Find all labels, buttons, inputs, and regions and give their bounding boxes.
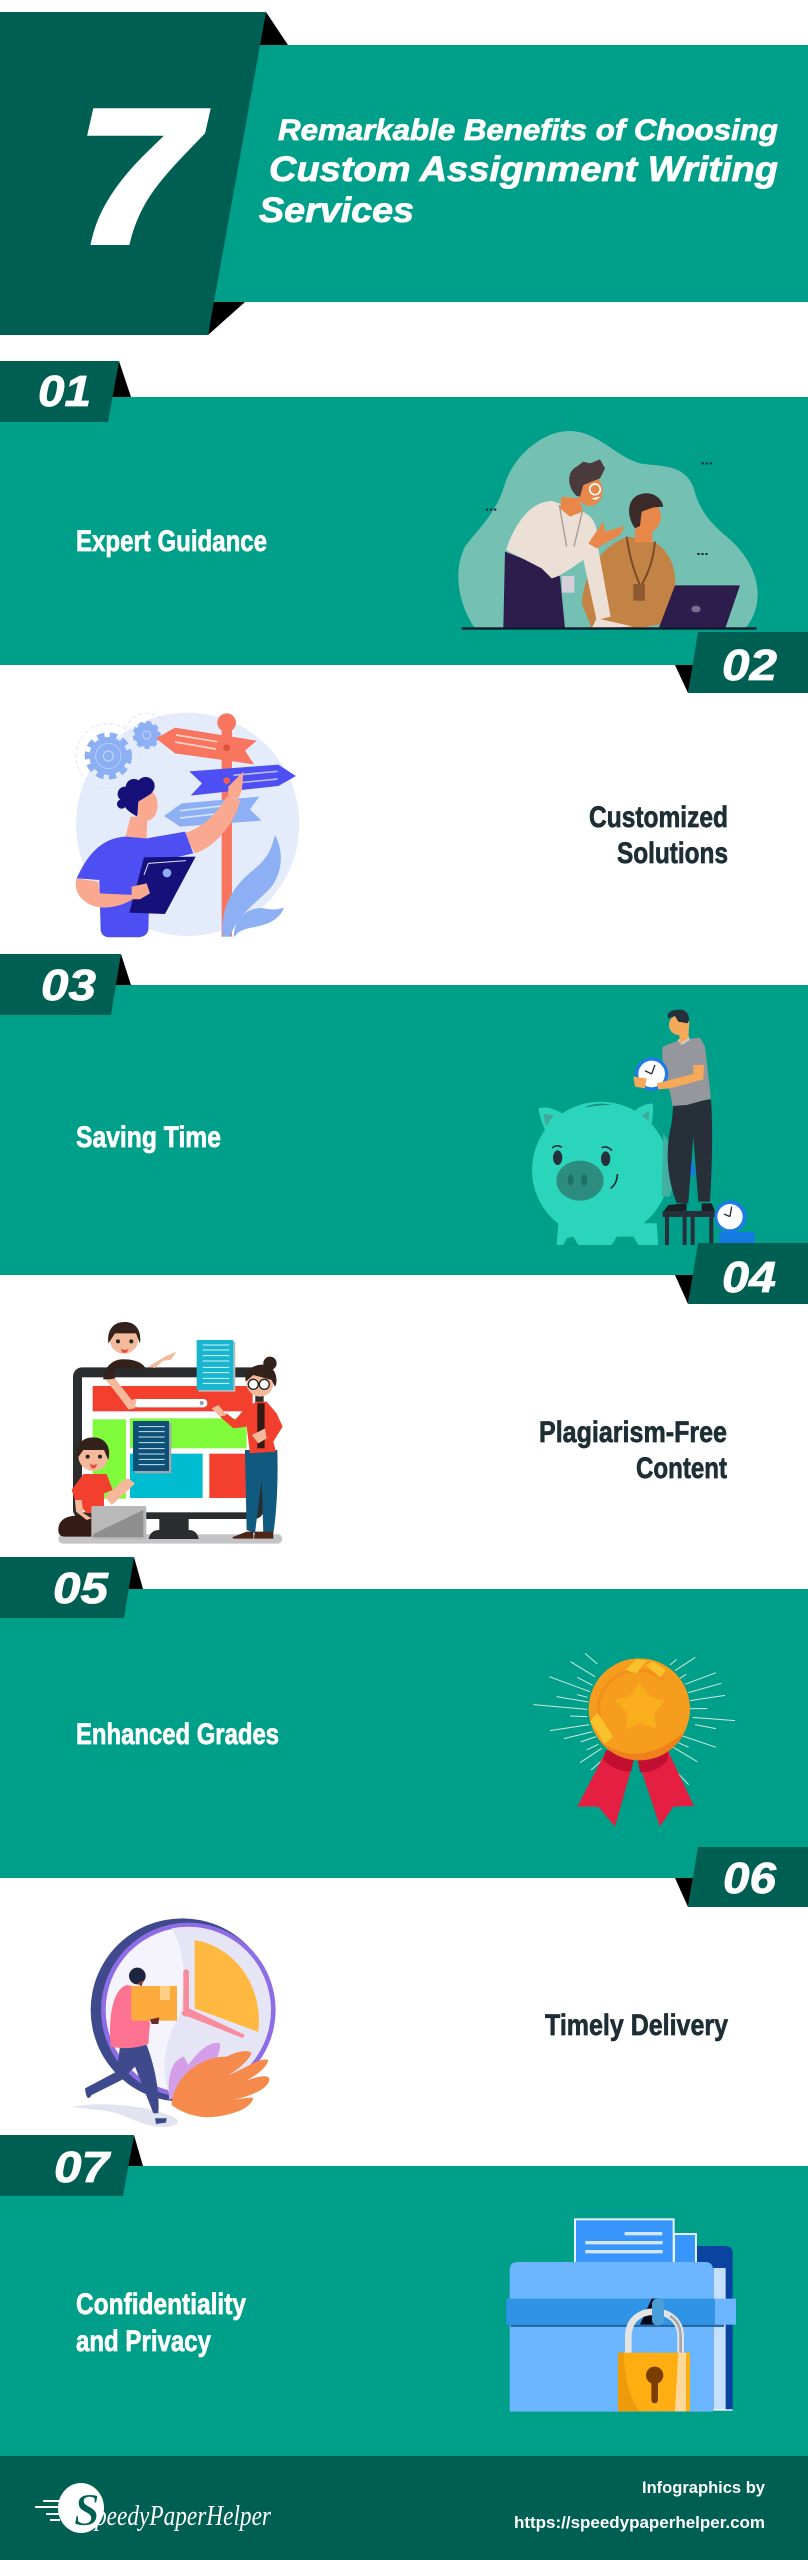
logo: S: [74, 2484, 100, 2535]
panel: 01 expert guidance: [0, 397, 808, 665]
panel: 03 saving time: [0, 985, 808, 1275]
badge fold: [675, 665, 693, 693]
badge 05: [0, 1557, 143, 1618]
badge 04: [675, 1243, 808, 1304]
badge body: [0, 954, 121, 1015]
logo: peedyPaperHelper: [93, 2501, 271, 2532]
illustration: courier and clock: [73, 1918, 276, 2127]
title: Custom Assignment Writing: [269, 150, 778, 189]
ribbon fold bottom: [208, 302, 245, 335]
badge fold: [128, 2135, 143, 2166]
badge body: [0, 1557, 134, 1618]
credit text: Infographics by: [642, 2478, 766, 2497]
badge number: 01: [38, 367, 91, 416]
badge 07: [0, 2135, 143, 2196]
illustration: man at signpost: [76, 713, 299, 937]
badge 01: [0, 361, 131, 422]
illustration: gold medal: [533, 1653, 735, 1827]
badge fold: [675, 1275, 693, 1304]
heading: Expert Guidance: [76, 525, 267, 558]
heading: and Privacy: [76, 2325, 211, 2358]
badge body: [688, 632, 808, 693]
heading: Customized: [589, 801, 728, 834]
badge body: [688, 1847, 808, 1907]
footer background: [0, 2456, 808, 2560]
panel background: [0, 1589, 808, 1878]
title: Remarkable Benefits of Choosing: [278, 114, 778, 147]
badge number: 06: [723, 1854, 777, 1903]
panel: 07 confidentiality and privacy: [0, 2166, 808, 2456]
footer: [0, 2456, 808, 2560]
badge fold: [128, 1557, 143, 1589]
panel: 02 customized solutions: [76, 713, 728, 937]
dark ribbon: [0, 12, 266, 335]
badge number: 03: [41, 961, 96, 1010]
badge 03: [0, 954, 131, 1015]
ribbon fold top: [259, 12, 288, 45]
panel background: [0, 2166, 808, 2456]
illustration: locked folder: [506, 2219, 736, 2412]
heading: Timely Delivery: [545, 2009, 728, 2042]
badge number: 02: [722, 641, 778, 690]
badge number: 05: [53, 1564, 109, 1613]
badge body: [0, 361, 119, 422]
heading: Saving Time: [76, 1121, 221, 1154]
heading: Enhanced Grades: [76, 1718, 279, 1751]
badge 06: [675, 1847, 808, 1907]
panel: 05 enhanced grades: [0, 1589, 808, 1878]
panel: 04 plagiarism-free content: [58, 1322, 727, 1544]
badge body: [0, 2135, 134, 2196]
heading: Solutions: [617, 837, 728, 870]
illustration: piggy bank and clock: [532, 1010, 755, 1245]
logo: [35, 2483, 271, 2535]
panel background: [0, 397, 808, 665]
title: Services: [259, 191, 414, 230]
badge 02: [675, 632, 808, 693]
header banner: [0, 12, 808, 335]
header teal band: [190, 45, 808, 302]
badge number: 04: [722, 1253, 776, 1302]
heading: [76, 2288, 246, 2358]
heading: [539, 1416, 727, 1485]
heading: Confidentiality: [76, 2288, 246, 2321]
badge number: 07: [54, 2143, 112, 2192]
badge fold: [112, 361, 131, 397]
panel: 06 timely delivery: [73, 1918, 728, 2127]
heading: Content: [636, 1452, 727, 1485]
heading: Plagiarism-Free: [539, 1416, 727, 1449]
illustration: team around monitor: [58, 1322, 283, 1544]
big number seven: 7: [76, 71, 208, 283]
illustration: two colleagues at laptop: [458, 431, 758, 630]
title: [259, 114, 778, 230]
credit text: https://speedypaperhelper.com: [514, 2513, 765, 2532]
badge fold: [115, 954, 131, 985]
badge fold: [675, 1878, 693, 1907]
credit text: [514, 2478, 766, 2532]
badge body: [688, 1243, 808, 1304]
panel background: [0, 985, 808, 1275]
heading: [589, 801, 728, 870]
